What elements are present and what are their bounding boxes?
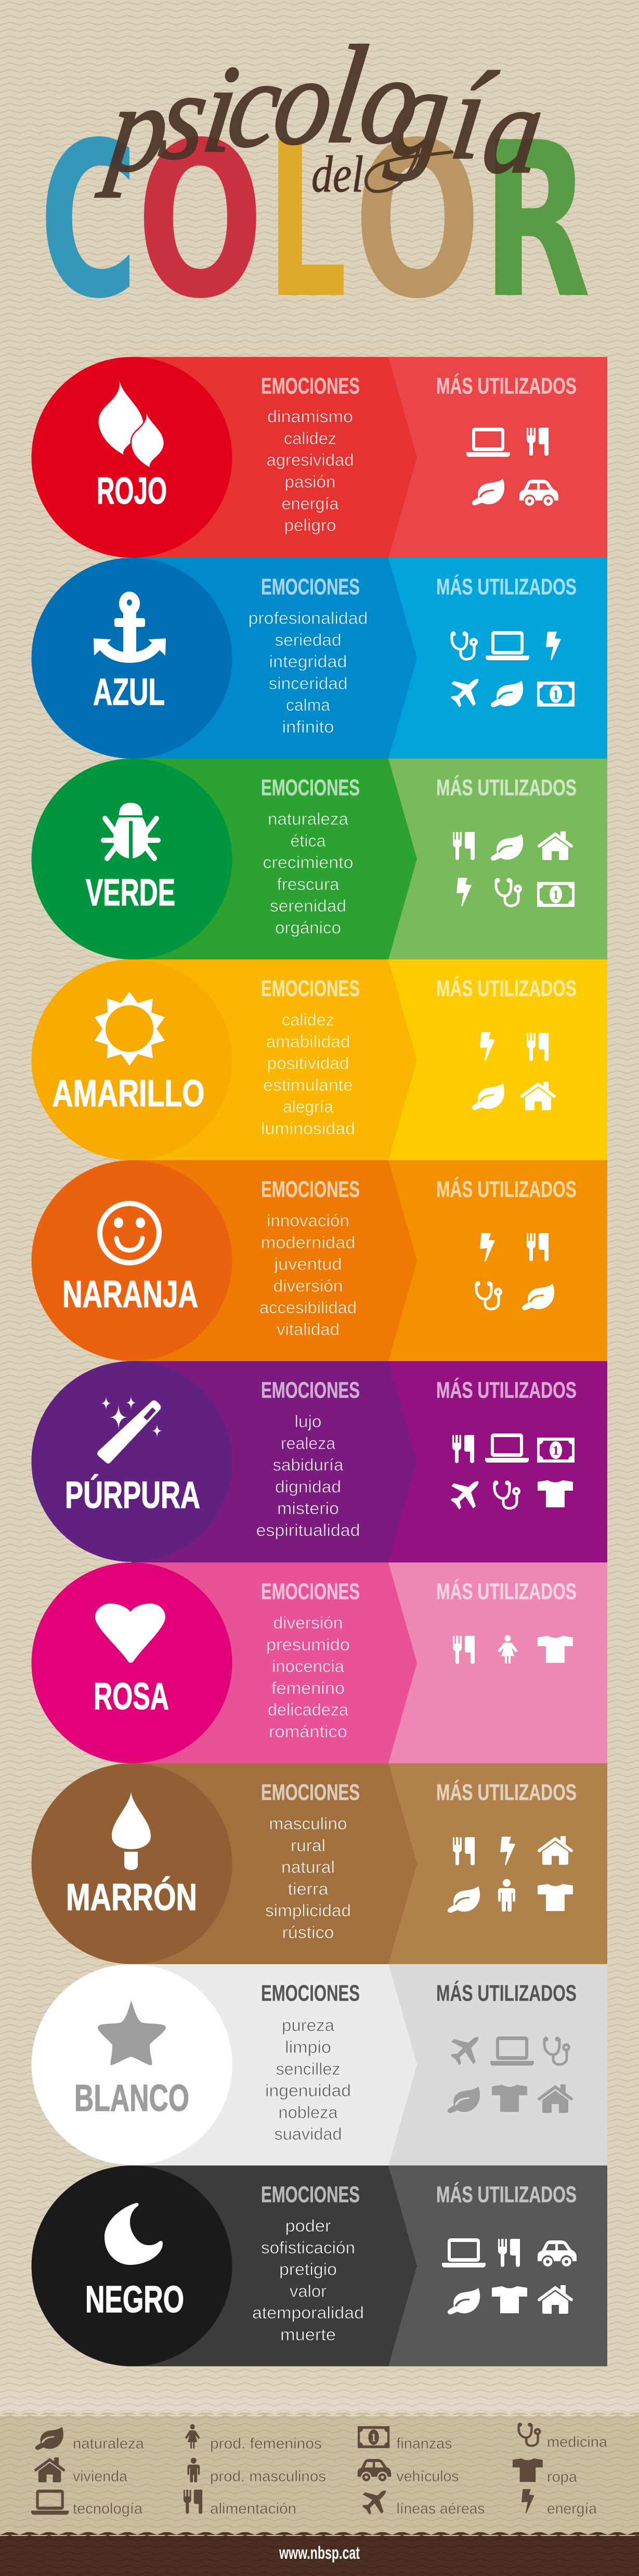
usage icons [442,2238,577,2314]
usage icons [475,1233,554,1310]
icon: flames [99,379,164,467]
emotions list [265,2016,351,2144]
emotions list: luminosidad [261,1119,355,1138]
emotions list: femenino [271,1678,345,1697]
legend labels: vivienda [73,2468,128,2485]
legend labels: alimentación [210,2501,296,2517]
emotions list: frescura [277,875,340,893]
title: COLOR large letters: L [267,97,347,345]
emotions list: calma [286,696,330,714]
legend labels: vehículos [396,2468,459,2485]
colour name: BLANCO [74,2078,189,2119]
icon: anchor [94,592,166,659]
panel: legend [0,2413,639,2536]
heading: más utilizados: MÁS UTILIZADOS [436,975,577,1001]
emotions list: ingenuidad [265,2081,351,2100]
emotions list: pureza [282,2016,334,2035]
panel: negro [31,2165,607,2366]
emotions list: infinito [282,717,334,736]
emotions list: calidez [284,429,336,447]
emotions list [259,1211,357,1339]
colour name: AZUL [93,671,165,713]
heading: emociones: EMOCIONES [261,976,360,1001]
emotions list: pasión [285,472,336,491]
colour name: MARRÓN [66,1876,197,1918]
usage icons [448,2036,571,2113]
heading: emociones: EMOCIONES [261,1780,360,1805]
panel: amarillo [31,959,607,1160]
title: COLOR large letters: O [137,97,264,345]
emotions list [265,1814,351,1942]
emotions list: simplicidad [265,1901,351,1920]
emotions list: seriedad [275,631,341,649]
title: psicología script: l [319,18,375,172]
heading: más utilizados: MÁS UTILIZADOS [436,373,577,399]
heading: más utilizados: MÁS UTILIZADOS [436,774,577,800]
emotions list: limpio [285,2037,331,2056]
panel: rosa [31,1562,607,1763]
icon: star [98,2001,166,2065]
emotions list [252,2216,364,2344]
emotions list: delicadeza [268,1700,348,1719]
usage icons [451,631,575,707]
heading: emociones: EMOCIONES [261,574,360,599]
icon: magic wand [97,1395,162,1464]
emotions list: accesibilidad [259,1298,357,1317]
emotions list: rústico [282,1923,334,1942]
heading: emociones: EMOCIONES [261,2182,360,2207]
emotions list: diversión [273,1276,343,1295]
panel: rojo [31,357,607,558]
panel: marrón [31,1763,607,1964]
emotions list: juventud [273,1255,342,1274]
legend labels: líneas aéreas [396,2501,485,2517]
legend labels: ropa [547,2469,578,2485]
usage icons [453,1635,573,1664]
emotions list: integridad [269,652,347,671]
colour name: NEGRO [85,2279,184,2321]
emotions list [256,1412,360,1540]
title: COLOR large letters: C [40,97,138,346]
footer band [0,2532,639,2576]
colour name: NARANJA [62,1274,198,1315]
colour name: AMARILLO [52,1073,205,1114]
emotions list: valor [290,2282,327,2300]
usage icons [472,1032,554,1110]
heading: emociones: EMOCIONES [261,1378,360,1403]
legend labels: prod. masculinos [210,2468,326,2485]
title: COLOR large letters [40,97,591,346]
emotions list: inocencia [272,1657,344,1676]
legend icons [31,2423,543,2515]
panel: azul [31,558,607,759]
emotions list: rural [291,1836,325,1855]
emotions list: poder [285,2216,331,2235]
legend labels: prod. femeninos [210,2436,322,2452]
legend labels: naturaleza [73,2436,145,2452]
emotions list: presumido [266,1635,350,1654]
usage icons [453,831,575,907]
emotions list [249,609,368,736]
emotions list [261,1010,355,1138]
emotions list: lujo [294,1412,321,1431]
emotions list: calidez [282,1010,334,1029]
emotions list: naturaleza [268,810,348,828]
title: del script: del [311,145,363,203]
emotions list: innovación [267,1211,349,1230]
title: psicología script: ogía [348,31,555,199]
heading: más utilizados: MÁS UTILIZADOS [436,1779,577,1805]
colour name: VERDE [86,872,175,914]
usage icons [448,1836,573,1913]
emotions list: dignidad [275,1477,341,1496]
legend labels: medicina [547,2434,608,2451]
heading: emociones: EMOCIONES [261,775,360,800]
colour name: ROSA [94,1676,169,1718]
emotions list: sencillez [276,2059,340,2078]
emotions list: amabilidad [266,1032,350,1051]
emotions list: sinceridad [268,674,347,693]
emotions list: dinamismo [267,407,353,426]
heading: más utilizados: MÁS UTILIZADOS [436,1980,577,2006]
icon: tree [112,1792,151,1870]
emotions list: sofisticación [261,2238,355,2257]
emotions list: profesionalidad [249,609,368,627]
emotions list: sabiduría [272,1456,344,1475]
emotions list: nobleza [279,2103,338,2122]
emotions list: positividad [267,1054,349,1073]
legend labels: finanzas [396,2436,452,2452]
emotions list: agresividad [266,451,354,469]
emotions list: pretigio [279,2260,337,2279]
colour name: PÚRPURA [65,1474,200,1516]
title: psicología script [95,18,557,199]
emotions list: vitalidad [277,1320,340,1339]
icon: moon [105,2203,163,2265]
emotions list [263,810,354,937]
heading: más utilizados: MÁS UTILIZADOS [436,1377,577,1403]
heading: emociones: EMOCIONES [261,1580,360,1605]
emotions list: tierra [288,1879,329,1898]
icon: bug [103,803,158,858]
emotions list: crecimiento [263,853,354,872]
legend labels: energía [547,2501,597,2517]
emotions list [266,407,354,535]
heading: emociones: EMOCIONES [261,1981,360,2006]
usage icons [466,428,558,506]
emotions list: muerte [280,2325,336,2344]
heading: emociones: EMOCIONES [261,1177,360,1202]
emotions list: alegría [283,1097,333,1116]
emotions list: espiritualidad [256,1521,360,1540]
emotions list: diversión [273,1613,343,1632]
emotions list [266,1613,350,1741]
panel: púrpura [31,1361,607,1562]
emotions list: suavidad [275,2125,342,2144]
icon: heart [95,1604,165,1663]
panel: verde [31,759,607,959]
legend labels: tecnología [73,2501,143,2517]
heading: emociones: EMOCIONES [261,374,360,399]
heading: más utilizados: MÁS UTILIZADOS [436,1176,577,1202]
heading: más utilizados: MÁS UTILIZADOS [436,1579,577,1605]
emotions list: ética [290,831,326,850]
legend labels [73,2434,608,2517]
panel: naranja [31,1160,607,1361]
title: psicología script: psico [95,32,342,197]
emotions list: realeza [281,1434,335,1453]
heading: más utilizados: MÁS UTILIZADOS [436,2181,577,2207]
colour name: ROJO [97,470,167,512]
emotions list: natural [281,1858,335,1877]
emotions list: energía [282,494,339,513]
emotions list: estimulante [263,1075,353,1094]
emotions list: orgánico [275,918,341,937]
emotions list: serenidad [270,896,346,915]
usage icons [451,1433,575,1509]
panel: blanco [31,1964,607,2165]
emotions list: atemporalidad [252,2303,364,2322]
emotions list: romántico [269,1722,347,1741]
emotions list: masculino [269,1814,347,1833]
icon: smiley [100,1203,159,1263]
emotions list: modernidad [261,1233,356,1252]
footer url: www.nbsp.cat [279,2543,360,2563]
title: COLOR large letters: O [354,97,481,345]
emotions list: misterio [277,1499,339,1518]
title: COLOR large letters: R [482,97,591,346]
heading: más utilizados: MÁS UTILIZADOS [436,573,577,599]
icon: sun [95,992,165,1066]
emotions list: peligro [284,516,336,535]
